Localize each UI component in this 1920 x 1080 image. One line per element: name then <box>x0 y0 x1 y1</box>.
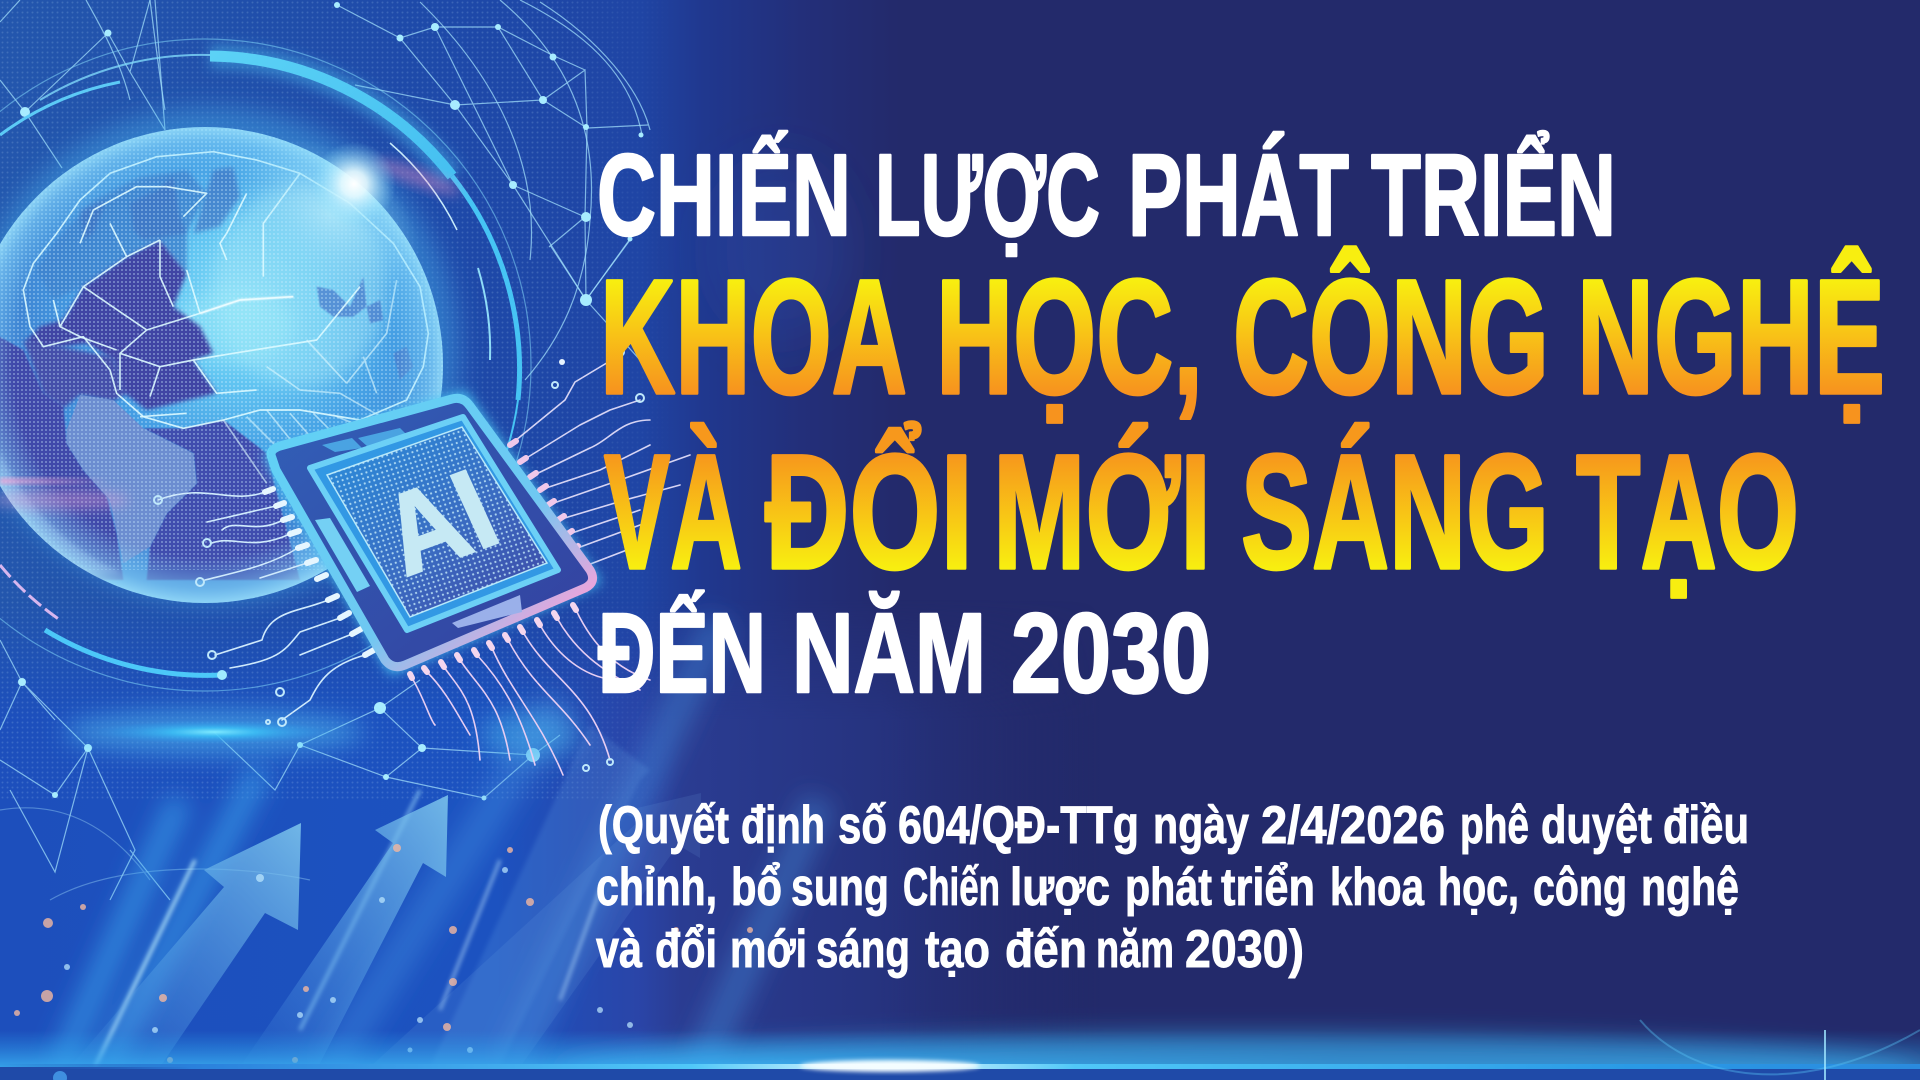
network node dots <box>18 2 644 800</box>
brain synapse lines <box>53 173 360 417</box>
subtitle line 1: số <box>838 796 887 855</box>
South America landmass <box>67 395 197 563</box>
subtitle line 2: học, <box>1438 858 1519 917</box>
brain outline <box>23 152 428 483</box>
pink lens streak <box>0 478 110 484</box>
subtitle line 3: tạo <box>925 920 990 979</box>
subtitle line 1: duyệt <box>1541 796 1652 855</box>
subtitle line 3: đổi <box>655 920 717 979</box>
title line 3: SÁNG <box>1241 420 1549 603</box>
bottom traces <box>412 610 650 775</box>
traced sphere artwork, coordinates in 3x zoom space <box>0 120 477 580</box>
subtitle line 2: khoa <box>1330 858 1424 917</box>
circuit traces from the chip <box>158 355 690 775</box>
subtitle line 2: công <box>1533 858 1627 917</box>
bright central synapse <box>200 297 293 313</box>
lens flare highlight <box>213 107 447 323</box>
bright glow on right half <box>213 187 387 387</box>
title line 1: CHIẾN <box>597 130 851 260</box>
right corner arc and vertical light <box>1640 1020 1920 1074</box>
subtitle line 1: định <box>741 796 825 855</box>
lower right dark mass <box>143 420 300 580</box>
subtitle line 2: bổ <box>731 858 782 917</box>
chip inner frame <box>310 417 558 630</box>
subtitle line 2: triển <box>1221 858 1315 917</box>
faint arrow behind left edge of text <box>442 726 648 1050</box>
subtitle line 1: 604/QĐ-TTg <box>898 796 1139 855</box>
chip pins <box>265 441 586 678</box>
large faint arrow <box>396 793 701 1044</box>
left traces <box>158 492 307 580</box>
network of lines and nodes around the globe <box>0 0 650 900</box>
background: navy with blue left image area <box>0 0 962 1067</box>
title line 3: MỚI <box>993 420 1211 603</box>
pale lower rim <box>0 456 118 574</box>
subtitle line 2: chỉnh, <box>596 858 717 917</box>
upper continent dark patches <box>80 167 240 240</box>
arrow 1 <box>100 823 301 1057</box>
small dark islands on right <box>317 277 413 380</box>
subtitle line 2: phát <box>1125 858 1212 917</box>
subtitle line 1: điều <box>1663 796 1749 855</box>
title <box>597 130 1885 716</box>
right traces <box>510 355 690 568</box>
subtitle line 1: phê <box>1460 796 1529 855</box>
lower left dark mass <box>0 333 123 580</box>
subtitle line 1: (Quyết <box>598 796 729 855</box>
subtitle line 2: sung <box>791 858 889 917</box>
title line 2: HỌC, <box>936 245 1203 428</box>
chip body <box>271 398 593 667</box>
chip label AI: AI <box>362 446 515 600</box>
chip dot field <box>327 427 547 617</box>
subtitle line 2: nghệ <box>1641 858 1739 917</box>
lower light streaks, glow and dots <box>14 620 820 1067</box>
title line 4: NĂM <box>792 590 986 716</box>
subtitle line 1: 2/4/2026 <box>1261 796 1445 855</box>
subtitle line 3: và <box>596 920 642 979</box>
title line 3: TẠO <box>1576 420 1799 603</box>
rings around the globe <box>0 39 531 691</box>
dotted texture <box>0 120 477 570</box>
subtitle <box>596 796 1749 979</box>
subtitle line 3: năm <box>1096 920 1174 979</box>
subtitle line 3: 2030) <box>1185 920 1304 979</box>
title line 1: TRIỂN <box>1371 130 1616 260</box>
title line 2: KHOA <box>600 245 907 428</box>
title line 1: LƯỢC <box>875 130 1100 260</box>
chip side strips <box>315 518 370 592</box>
band linking Europe and Americas <box>23 340 127 408</box>
subtitle line 1: ngày <box>1153 796 1249 855</box>
title line 4: ĐẾN <box>598 590 766 716</box>
title line 1: PHÁT <box>1128 130 1349 260</box>
title line 3: VÀ <box>604 420 742 603</box>
arrow 2 <box>260 795 448 1053</box>
orange sparkle dots <box>14 844 753 1063</box>
subtitle line 3: sáng <box>816 920 910 979</box>
pale blue sparkle dots <box>64 867 633 1053</box>
upper left darker lobe <box>37 170 207 300</box>
subtitle line 2: lược <box>1010 858 1110 917</box>
Europe dark mass <box>27 240 217 410</box>
subtitle line 3: mới <box>730 920 807 979</box>
title line 3: ĐỔI <box>765 420 973 603</box>
AI microchip <box>265 398 593 678</box>
title line 4: 2030 <box>1011 590 1211 716</box>
globe with brain <box>0 107 477 603</box>
bottom glow band <box>0 1020 1920 1080</box>
trace terminals <box>154 348 644 771</box>
subtitle line 2: Chiến <box>903 858 1000 917</box>
subtitle line 3: đến <box>1005 920 1087 979</box>
title line 2: CÔNG <box>1233 245 1549 428</box>
